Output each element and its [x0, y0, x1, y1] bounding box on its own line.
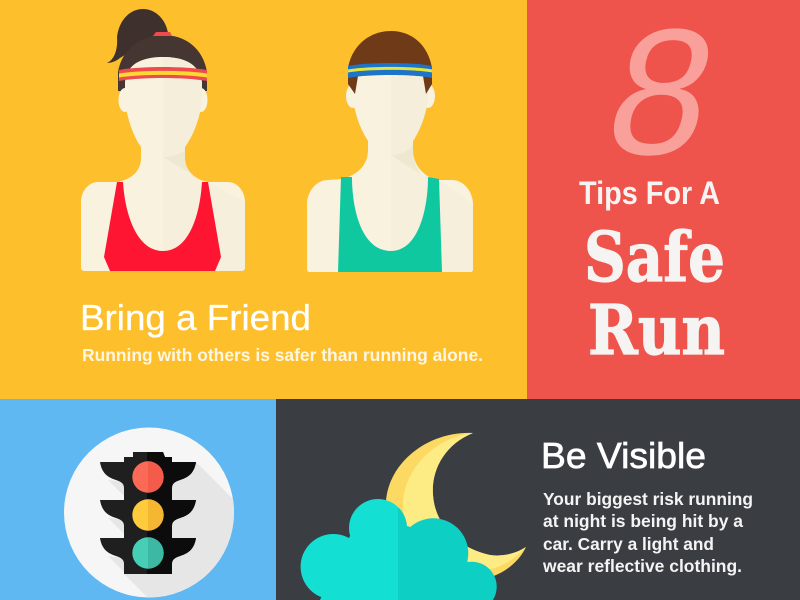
red light shade: [148, 461, 164, 493]
housing dark half: [147, 452, 196, 574]
text: be visible description: car. Carry a light and: [543, 534, 714, 554]
heading: Safe: Safe: [584, 218, 725, 298]
icon: crescent moon and cloud: [301, 433, 526, 600]
icon: traffic light: [64, 428, 234, 598]
text: friend description: Running with others is safer than running alone.: [82, 345, 483, 365]
long shadow: [108, 462, 234, 598]
hair tie: [153, 32, 172, 36]
heading: Tips For A: Tips For A: [579, 175, 720, 211]
text: be visible description: [542, 489, 753, 576]
man headband: [348, 63, 432, 78]
woman hair: [118, 35, 207, 91]
panel: dark be visible panel: [276, 399, 800, 600]
text: be visible description: wear reflective clothing.: [542, 556, 742, 576]
text: be visible description: Your biggest risk running: [543, 489, 753, 509]
chest shaded half: [163, 157, 245, 271]
man face: [353, 72, 428, 152]
man body: [307, 145, 473, 272]
heading: Bring a Friend: Bring a Friend: [80, 297, 311, 338]
man chest shaded half: [391, 155, 473, 272]
woman body: [81, 150, 245, 271]
ponytail: [107, 9, 168, 63]
white circle: [64, 428, 234, 598]
shaded half: [163, 57, 202, 157]
red light: [132, 461, 164, 493]
man right sideburn: [423, 76, 432, 94]
icon: woman runner: [81, 9, 245, 271]
man left ear: [346, 84, 360, 108]
man neck shadow: [391, 145, 421, 174]
cloud left half: [300, 499, 398, 600]
panel: blue traffic light panel: [0, 399, 276, 600]
heading: Run: Run: [588, 291, 725, 371]
woman right ear: [194, 88, 208, 112]
moon inner: [403, 433, 526, 570]
icon: man runner: [307, 31, 473, 272]
red tank top: [104, 182, 221, 271]
woman left ear: [118, 88, 132, 112]
man hair: [348, 31, 432, 80]
man left sideburn: [348, 76, 358, 94]
heading: Be Visible: Be Visible: [541, 435, 706, 476]
woman headband: [119, 67, 207, 81]
housing body: [100, 452, 196, 574]
man right ear: [421, 84, 435, 108]
panel: yellow friend panel: [0, 0, 527, 399]
cloud right half: [398, 507, 497, 600]
man shaded half: [391, 72, 428, 155]
moon outer: [386, 433, 526, 580]
neck shadow: [163, 150, 192, 174]
text: be visible description: at night is being hit by a: [543, 511, 743, 531]
green tank top: [338, 177, 442, 272]
woman face: [125, 57, 202, 154]
amber light: [132, 499, 164, 531]
green light shade: [148, 537, 164, 569]
amber light shade: [148, 499, 164, 531]
green light: [132, 537, 164, 569]
panel: red title panel: [527, 0, 800, 399]
